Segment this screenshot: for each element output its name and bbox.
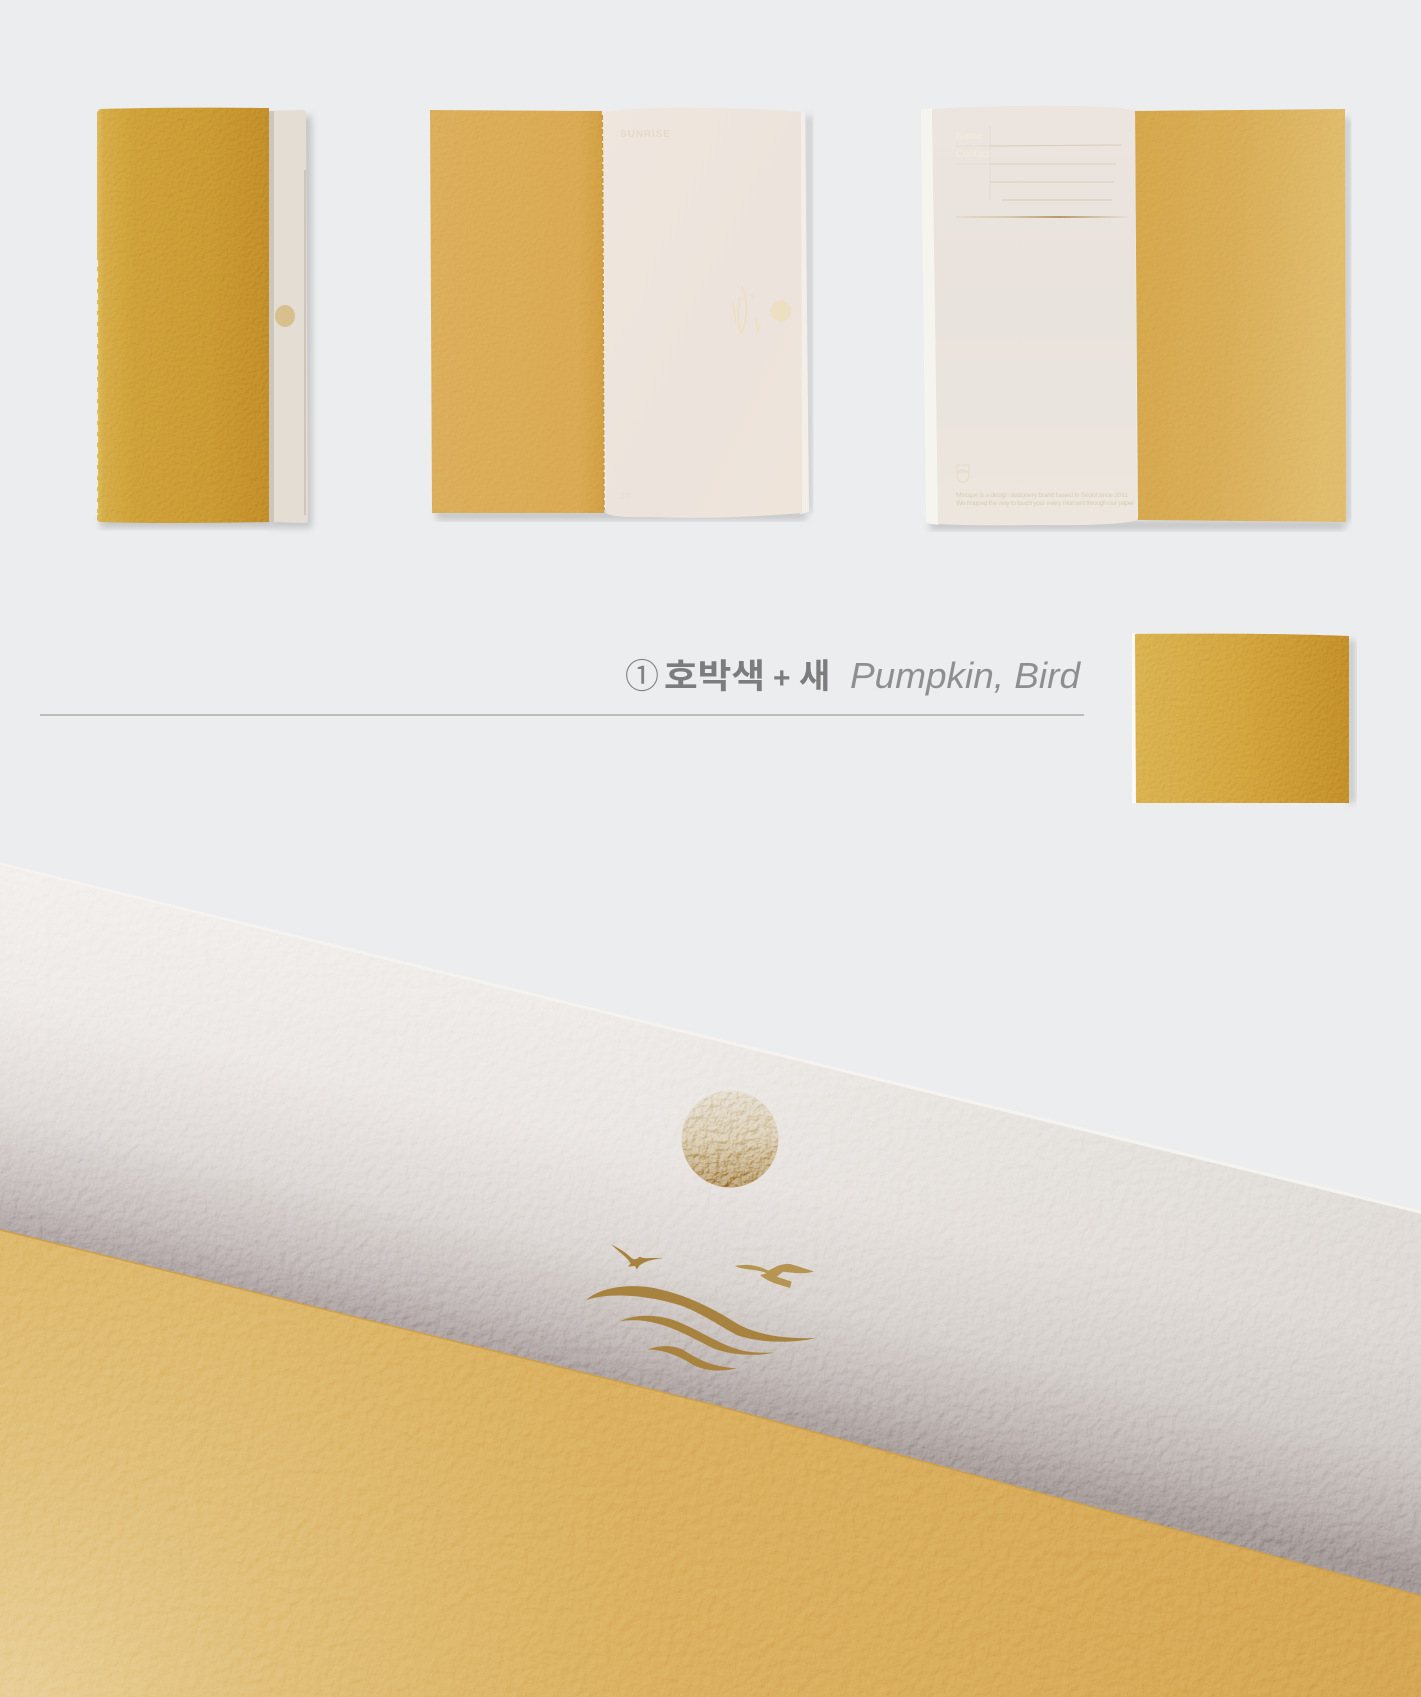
heading: 호박색 + 새 Pumpkin, Bird: ①: [625, 658, 659, 696]
notebook: open inside cover with sunrise page: [430, 108, 812, 520]
label: Contact: Contact: [956, 149, 991, 160]
yellow cover: [97, 108, 269, 523]
cream title page: [603, 108, 802, 518]
icon: waves: [587, 1286, 816, 1371]
label: Name: Name: [956, 131, 983, 142]
heading: 호박색 + 새 Pumpkin, Bird: 새: [799, 658, 830, 696]
heading: 호박색 + 새 Pumpkin, Bird: [625, 655, 1081, 696]
white edge of the pages: [921, 108, 938, 525]
notebook: open back cover with contact page: [921, 106, 1350, 530]
yellow back cover: [1135, 109, 1346, 522]
back page: [269, 110, 308, 523]
divider line under heading: [40, 714, 1084, 716]
cream contact page: [932, 106, 1137, 525]
foil emblem: sun, birds and waves: [587, 1090, 816, 1371]
icon: foil sun: [680, 1090, 780, 1190]
icon: left bird: [611, 1244, 663, 1269]
hero close-up photo: [0, 860, 1421, 1697]
brand statement: Mixtape is a design stationery brand based in Seoul since 2011: [956, 492, 1128, 499]
colour swatch: pumpkin cover: [1132, 633, 1355, 804]
heading: 호박색 + 새 Pumpkin, Bird: +: [773, 662, 791, 695]
brand statement: We hopped the way to touch your every moment through our paper: [956, 500, 1135, 507]
heading: 호박색 + 새 Pumpkin, Bird: Pumpkin, Bird: [850, 655, 1081, 696]
yellow cover foreground: [0, 1225, 1421, 1697]
contact form lines: [956, 126, 1128, 218]
yellow inner cover: [430, 110, 604, 513]
icon: right bird: [735, 1264, 814, 1288]
notebook: closed view with cover folded: [97, 108, 312, 528]
icon: gold sun on back page: [275, 305, 295, 327]
icon: foil sun and waves emblem: [733, 287, 792, 334]
brand statement: [956, 492, 1135, 507]
icon: brand mark: [957, 465, 969, 482]
label: page year: 20: [620, 491, 631, 501]
heading: 호박색 + 새 Pumpkin, Bird: 호박색: [664, 658, 765, 696]
label: SUNRISE: SUNRISE: [620, 129, 671, 140]
white edge of the pages: [798, 112, 809, 514]
inner paper page: [0, 860, 1421, 1605]
